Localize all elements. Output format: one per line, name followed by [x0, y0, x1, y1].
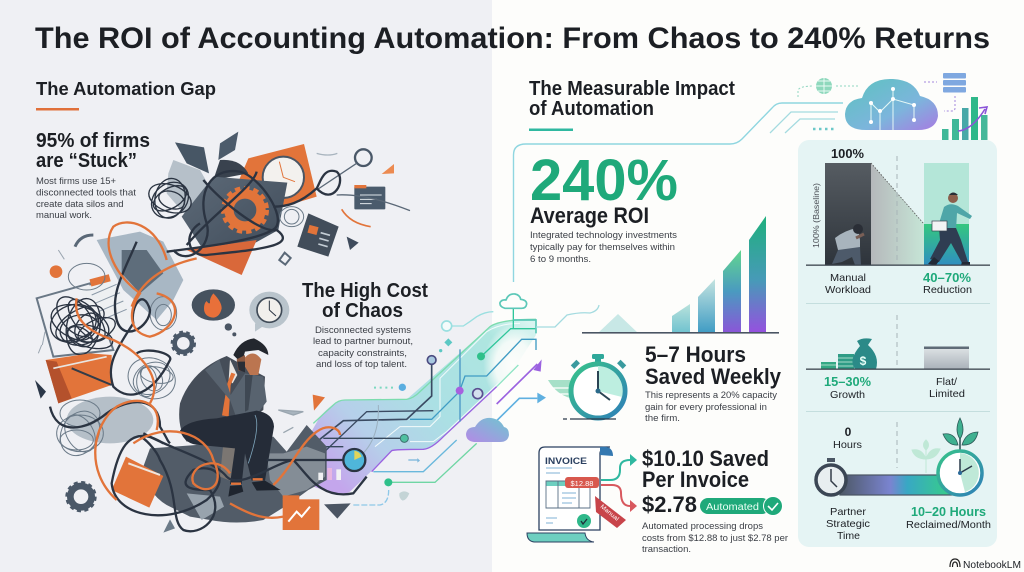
icon: lilac and teal cloud — [466, 418, 509, 442]
left background panel — [0, 0, 492, 572]
ROI stat: 6 to 9 months. — [530, 254, 591, 265]
icon: invoice — [527, 447, 626, 542]
badge: Automated: Automated — [706, 502, 759, 513]
illustration: flowing tech ribbon — [300, 308, 546, 505]
orange folder left — [35, 353, 112, 403]
text block: saved per invoice: $2.78 — [642, 492, 697, 517]
text block: saved per invoice: Per Invoice — [642, 467, 749, 492]
time row: 0 — [845, 425, 852, 439]
time row: 10–20 Hours — [911, 504, 986, 519]
ROI stat: 240% — [530, 148, 678, 213]
orange cables — [76, 222, 340, 518]
ROI stat: typically pay for themselves within — [530, 242, 675, 253]
rising bar chart — [582, 216, 779, 334]
heading: The Measurable Impact of Automation — [529, 78, 735, 131]
arrows from invoice — [601, 454, 637, 512]
time row: Partner — [830, 506, 867, 518]
icon: faint sprout — [912, 440, 940, 473]
icon: cloud network — [845, 79, 938, 130]
icon: mini growth bars with arrow — [942, 97, 988, 140]
growth row — [806, 315, 990, 401]
time row: Time — [837, 530, 860, 542]
icon: server stack — [924, 73, 966, 111]
growth row: 15–30% — [824, 374, 871, 389]
text block: saved per invoice — [642, 446, 788, 555]
workload row: 40–70% — [923, 270, 971, 285]
icon: walking worker — [928, 192, 972, 265]
text block: hours saved — [645, 342, 782, 424]
workload row: 100% — [831, 147, 864, 161]
workload row: Workload — [825, 284, 871, 296]
tangled cables — [50, 171, 367, 531]
thought bubbles — [192, 289, 289, 336]
ROI stat — [530, 148, 678, 265]
stressed person — [179, 338, 281, 497]
time row: Strategic — [826, 518, 870, 530]
logo: NotebookLM: NotebookLM — [963, 559, 1021, 571]
text block: saved per invoice: costs from $12.88 to just $2.78 per — [642, 533, 788, 544]
gray shapes and paper stack — [37, 232, 195, 511]
text block: saved per invoice: Automated processing drops — [642, 521, 763, 532]
text block: hours saved: Saved Weekly — [645, 364, 782, 389]
icon: clock with leaves — [938, 418, 982, 495]
icon: invoice: Manual — [599, 504, 619, 523]
text block: 95% of firms are stuck: Most firms use 15+ — [36, 176, 116, 187]
connector lines to cloud — [536, 112, 838, 327]
comparison panel — [798, 140, 997, 547]
text block: The High Cost of Chaos: Disconnected systems — [315, 325, 411, 336]
icon: outlined cloud with circuit box — [500, 294, 536, 333]
time row: Reclaimed/Month — [906, 520, 991, 531]
text block: hours saved: 5–7 Hours — [645, 342, 746, 367]
workload row: 100% (Baseline) — [811, 183, 821, 248]
rock base and figure seat — [143, 395, 351, 533]
text block: hours saved: This represents a 20% capacity — [645, 390, 777, 401]
text block: The High Cost of Chaos — [302, 279, 428, 370]
text block: The High Cost of Chaos: The High Cost — [302, 279, 428, 302]
text block: The High Cost of Chaos: capacity constraints, — [318, 348, 407, 359]
orange folders — [112, 457, 319, 530]
icon: invoice: $12.88 — [571, 479, 593, 488]
text block: saved per invoice: transaction. — [642, 544, 691, 555]
text block: 95% of firms are stuck: manual work. — [36, 210, 92, 221]
workload row: Reduction — [923, 284, 972, 296]
connector line around ROI panel — [514, 103, 843, 282]
text block: The High Cost of Chaos: and loss of top talent. — [316, 359, 407, 370]
text block: 95% of firms are stuck: disconnected tools that — [36, 188, 136, 198]
text block: 95% of firms are stuck: 95% of firms — [36, 129, 150, 152]
time row — [816, 418, 991, 542]
text block: saved per invoice: $10.10 Saved — [642, 446, 769, 471]
pie dial on ribbon — [318, 451, 362, 480]
icon: kneeling worker — [832, 224, 864, 265]
text block: 95% of firms are stuck: create data silos and — [36, 199, 124, 210]
workload row — [806, 147, 990, 296]
badge: Automated — [700, 496, 783, 516]
ROI stat: Average ROI — [530, 203, 649, 228]
text block: 95% of firms are stuck — [36, 129, 150, 221]
growth row: $ — [860, 354, 867, 368]
text block: hours saved: gain for every professional in — [645, 402, 767, 413]
illustration: tangled chaos cluster — [35, 132, 410, 533]
text block: hours saved: the firm. — [645, 413, 680, 424]
text block: 95% of firms are stuck: are “Stuck” — [36, 149, 137, 172]
dots row — [813, 128, 837, 130]
text block: The High Cost of Chaos: lead to partner burnout, — [313, 336, 413, 347]
time row: Hours — [833, 439, 862, 451]
icon: invoice: INVOICE — [545, 456, 587, 466]
title: The ROI of Accounting Automation: From Chaos to 240% Returns — [35, 22, 990, 55]
icon: winged stopwatch — [548, 354, 626, 419]
workload row: Manual — [830, 272, 866, 284]
icon: stopwatch — [816, 458, 846, 495]
right background panel — [492, 0, 1024, 572]
heading: The Measurable Impact of Automation: of Automation — [529, 98, 654, 120]
growth row: Limited — [929, 388, 965, 400]
ROI stat: Integrated technology investments — [530, 230, 677, 241]
icon: globe — [798, 78, 860, 97]
heading: The Measurable Impact of Automation: The Measurable Impact — [529, 78, 735, 100]
text block: The High Cost of Chaos: of Chaos — [322, 299, 403, 322]
scribbles — [45, 175, 196, 357]
heading: The Automation Gap: The Automation Gap — [36, 79, 216, 99]
shards and panels in top cluster — [167, 132, 410, 275]
growth row: Flat/ — [936, 376, 957, 388]
growth row: Growth — [830, 389, 865, 401]
